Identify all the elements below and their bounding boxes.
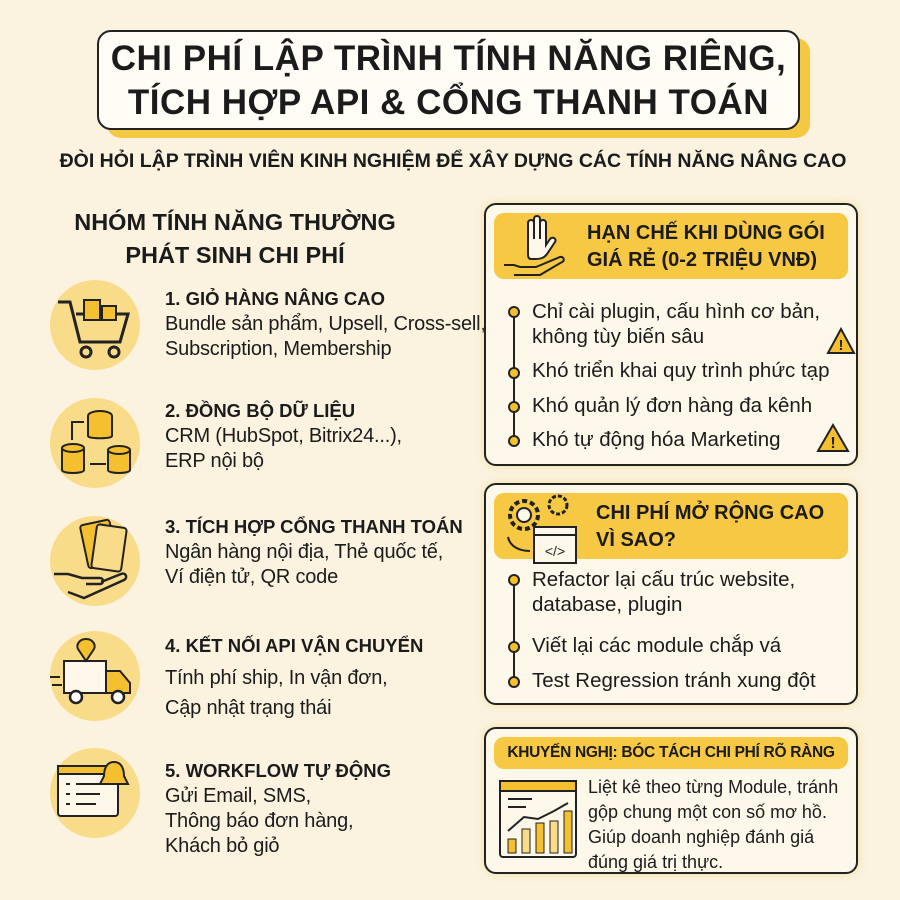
panel header (494, 737, 848, 769)
left heading: PHÁT SINH CHI PHÍ (125, 242, 345, 268)
panel header: CHI PHÍ MỞ RỘNG CAO (596, 502, 824, 524)
subtitle: ĐÒI HỎI LẬP TRÌNH VIÊN KINH NGHIỆM ĐỂ XÂY DỰNG CÁC TÍNH NĂNG NÂNG CAO (60, 150, 846, 172)
icon: warning: ! (838, 337, 844, 354)
left heading: NHÓM TÍNH NĂNG THƯỜNG (74, 209, 396, 235)
text: gộp chung một con số mơ hồ. (588, 802, 827, 822)
item: shipping: Cập nhật trạng thái (165, 697, 331, 719)
item: shipping: 4. KẾT NỐI API VẬN CHUYỂN (165, 635, 423, 656)
icon: warning: ! (830, 435, 836, 452)
icon: browser with bell (50, 748, 140, 838)
panel: limitations: Khó quản lý đơn hàng đa kênh (532, 394, 812, 417)
icon: cards in hand (50, 516, 140, 606)
panel: limitations: Khó triển khai quy trình phức tạp (532, 359, 829, 382)
item: workflow: Gửi Email, SMS, (165, 785, 311, 807)
panel: recommendation (484, 727, 858, 874)
text (588, 777, 838, 872)
icon: warning (816, 423, 850, 452)
icon: chart (499, 780, 577, 858)
item: payment: 3. TÍCH HỢP CỔNG THANH TOÁN (165, 516, 463, 537)
title: CHI PHÍ LẬP TRÌNH TÍNH NĂNG RIÊNG, (111, 39, 786, 78)
panel: expansion cost: Viết lại các module chắp vá (532, 634, 781, 657)
panel header: GIÁ RẺ (0-2 TRIỆU VNĐ) (587, 249, 817, 271)
item: workflow: Khách bỏ giỏ (165, 835, 279, 857)
icon: hand (504, 215, 565, 276)
bullet list: Refactor lại cấu trúc website, (532, 568, 795, 591)
icon: cart (50, 280, 140, 370)
panel: expansion cost: Test Regression tránh xung đột (532, 669, 816, 692)
panel header: VÌ SAO? (596, 529, 676, 551)
panel header: KHUYẾN NGHỊ: BÓC TÁCH CHI PHÍ RÕ RÀNG (507, 744, 835, 761)
item: payment: Ví điện tử, QR code (165, 566, 338, 588)
icon: warning (826, 327, 856, 354)
item: workflow (50, 748, 391, 857)
left heading (74, 209, 396, 268)
icon: gears and code (507, 494, 577, 564)
panel: limitations (484, 203, 858, 466)
bullet list: không tùy biến sâu (532, 325, 704, 348)
item: advanced cart: Bundle sản phẩm, Upsell, Cross-sell, (165, 313, 486, 335)
item: workflow: 5. WORKFLOW TỰ ĐỘNG (165, 760, 391, 781)
item: advanced cart: Subscription, Membership (165, 338, 391, 360)
bullet list: Chỉ cài plugin, cấu hình cơ bản, (532, 300, 820, 323)
item: payment: Ngân hàng nội địa, Thẻ quốc tế, (165, 541, 443, 563)
item: workflow: Thông báo đơn hàng, (165, 810, 353, 832)
icon: truck (50, 631, 140, 721)
bullet list: database, plugin (532, 593, 682, 616)
panel: limitations: Khó tự động hóa Marketing (532, 428, 780, 451)
panel header: HẠN CHẾ KHI DÙNG GÓI (587, 222, 825, 244)
title: TÍCH HỢP API & CỔNG THANH TOÁN (128, 83, 769, 122)
title (97, 30, 800, 130)
item: data sync: ERP nội bộ (165, 450, 264, 472)
icon: gears and code: </> (545, 543, 565, 559)
text: Giúp doanh nghiệp đánh giá (588, 827, 814, 847)
item: data sync: 2. ĐỒNG BỘ DỮ LIỆU (165, 400, 355, 421)
item: shipping: Tính phí ship, In vận đơn, (165, 667, 388, 689)
item: advanced cart (50, 280, 486, 370)
text: Liệt kê theo từng Module, tránh (588, 777, 838, 797)
text: đúng giá trị thực. (588, 852, 723, 872)
item: shipping (50, 631, 423, 721)
icon: databases (50, 398, 140, 488)
panel header (494, 213, 848, 279)
bullet list (532, 568, 795, 616)
item: advanced cart: 1. GIỎ HÀNG NÂNG CAO (165, 288, 385, 309)
item: payment (50, 516, 463, 606)
panel header (494, 493, 848, 559)
panel: expansion cost (484, 483, 858, 705)
item: data sync: CRM (HubSpot, Bitrix24...), (165, 425, 402, 447)
bullet list (532, 300, 820, 348)
item: data sync (50, 398, 402, 488)
